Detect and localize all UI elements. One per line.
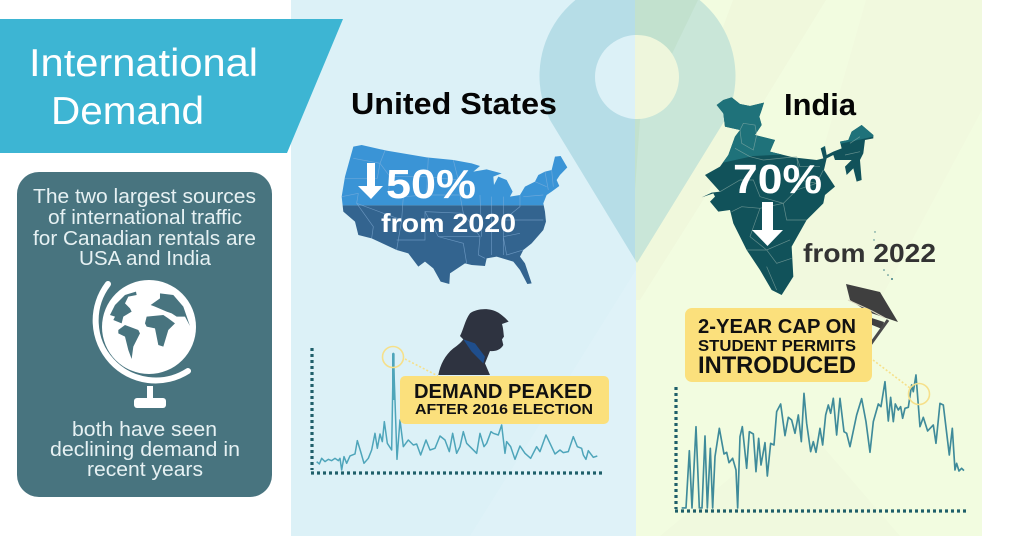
callout: student permits: 2-YEAR CAP ON bbox=[698, 316, 856, 338]
text: conclusion bbox=[50, 418, 240, 481]
title banner: Demand bbox=[51, 90, 204, 133]
line chart: United States demand bbox=[311, 348, 603, 473]
stat: 50%: 50% bbox=[386, 161, 476, 207]
map: India bbox=[702, 97, 873, 295]
callout: student permits bbox=[685, 308, 872, 382]
heading: India: India bbox=[784, 87, 857, 122]
icon: graduation cap bbox=[846, 284, 898, 345]
icon: scattered dots bbox=[873, 231, 893, 280]
text: intro bbox=[33, 185, 256, 270]
line chart: India demand bbox=[675, 375, 967, 511]
icon: down arrow bbox=[358, 163, 383, 199]
text: intro: USA and India bbox=[79, 247, 212, 270]
panel: India background bbox=[636, 0, 982, 536]
title banner bbox=[0, 19, 343, 153]
text: intro: The two largest sources bbox=[33, 185, 256, 208]
callout: demand peaked: DEMAND PEAKED bbox=[414, 381, 592, 403]
text: conclusion: declining demand in bbox=[50, 438, 240, 461]
icon: down arrow bbox=[752, 202, 783, 246]
icon: location pin backdrop bbox=[540, 0, 736, 263]
stat: 70%: 70% bbox=[733, 156, 822, 202]
icon: globe bbox=[96, 280, 196, 408]
text: from 2022: from 2022 bbox=[803, 238, 936, 268]
icon: silhouette bbox=[438, 309, 509, 375]
text: intro: of international traffic bbox=[48, 206, 242, 229]
title banner: International bbox=[29, 42, 258, 85]
callout marker: peak bbox=[382, 346, 438, 376]
text: conclusion: recent years bbox=[87, 458, 203, 481]
panel: summary bbox=[17, 172, 272, 497]
text: intro: for Canadian rentals are bbox=[33, 227, 256, 250]
callout: demand peaked bbox=[400, 376, 609, 424]
text: conclusion: both have seen bbox=[72, 418, 217, 441]
map: United States bbox=[342, 145, 567, 284]
callout marker: permit cap bbox=[873, 360, 930, 404]
callout: student permits: STUDENT PERMITS bbox=[698, 338, 856, 355]
callout: demand peaked: AFTER 2016 ELECTION bbox=[415, 401, 593, 418]
callout: student permits: INTRODUCED bbox=[698, 352, 856, 379]
heading: United States: United States bbox=[351, 86, 557, 121]
text: from 2020: from 2020 bbox=[381, 208, 516, 238]
panel: United States background bbox=[291, 0, 636, 536]
